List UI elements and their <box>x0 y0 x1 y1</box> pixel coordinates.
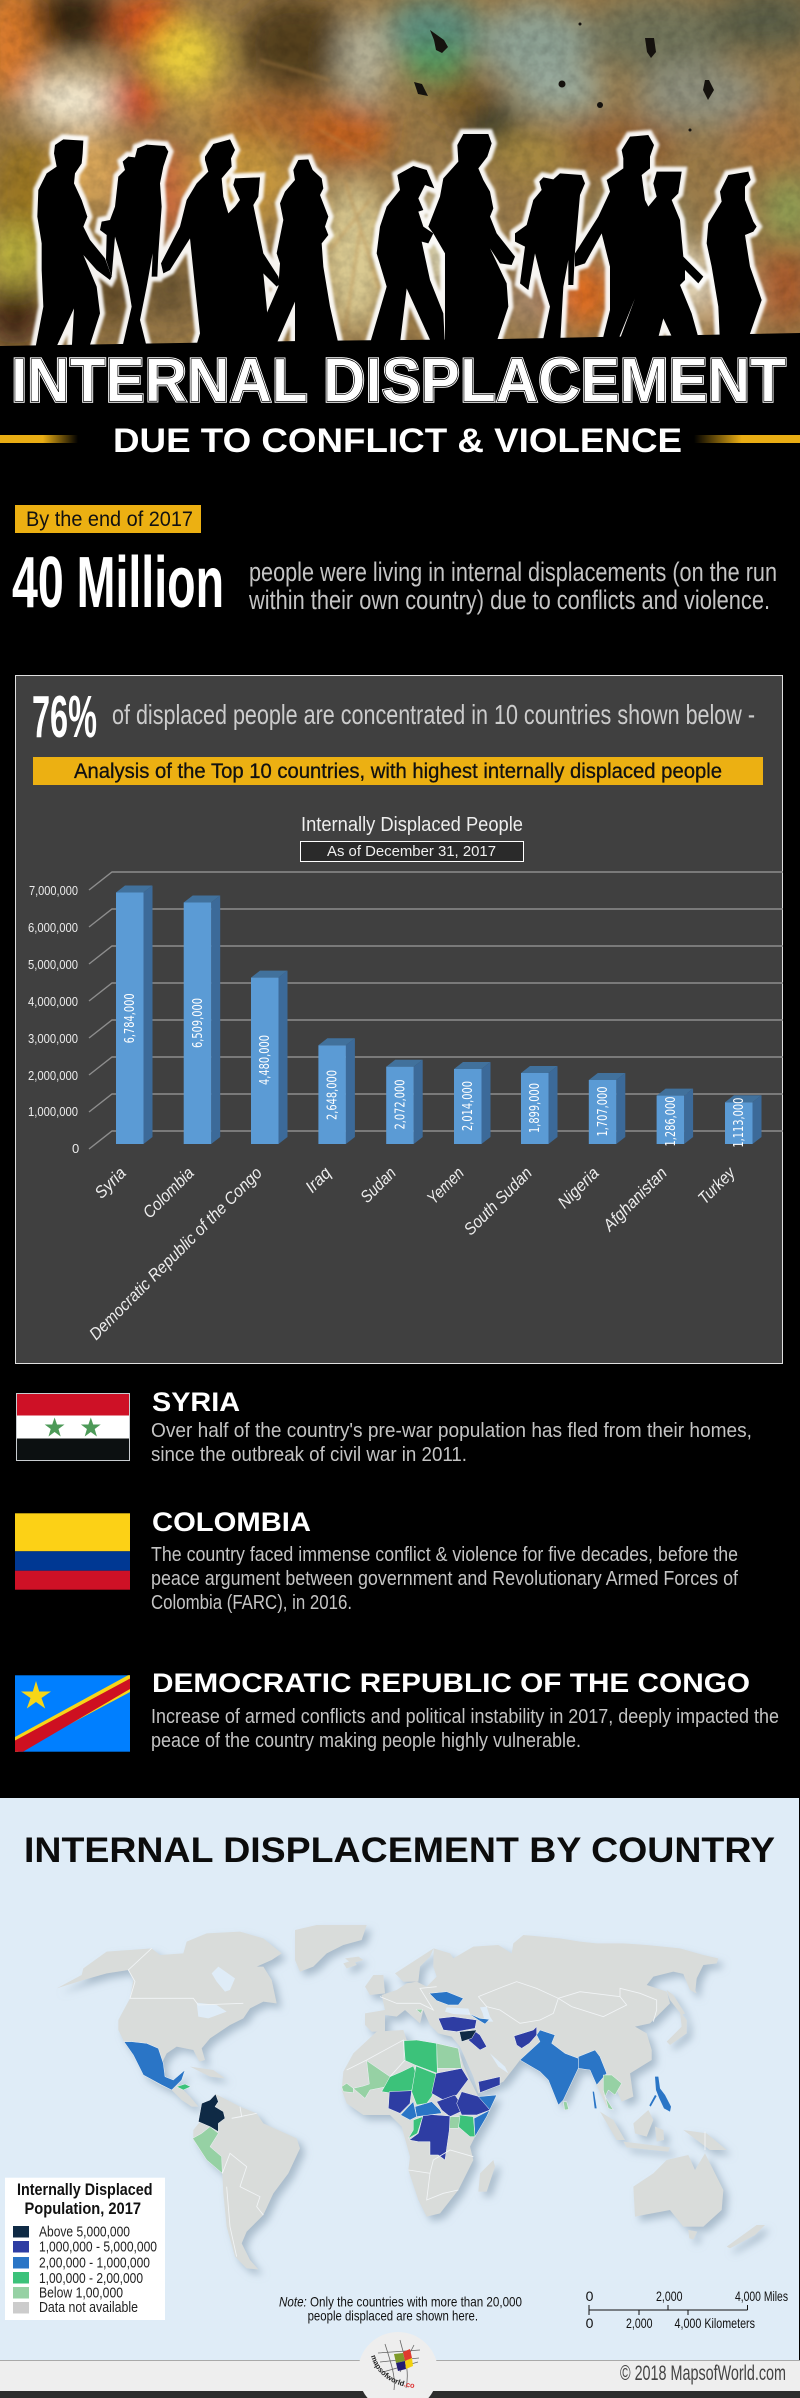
bar: Nigeria: 1,707,000 <box>595 1086 611 1136</box>
y axis labels: 3,000,000 <box>28 1031 78 1046</box>
note: people displaced are shown here. <box>308 2308 478 2324</box>
legend item: 1,000,000 to 5,000,000 <box>13 2238 157 2256</box>
text block: Colombia: Colombia (FARC), in 2016. <box>151 1592 352 1614</box>
text block: DR Congo <box>151 1706 779 1752</box>
x axis country labels: Syria <box>91 1163 130 1202</box>
bar: Afghanistan <box>657 1089 693 1146</box>
heading: Syria: SYRIA <box>152 1387 240 1417</box>
bar: Turkey: 1,113,000 <box>731 1098 747 1148</box>
legend title: Population, 2017 <box>24 2199 141 2218</box>
text block: Syria: Over half of the country's pre-war population has fled from their homes, <box>151 1420 752 1442</box>
legend title <box>17 2180 152 2218</box>
legend item: 1,000,000 to 5,000,000: 1,000,000 - 5,000,000 <box>39 2238 157 2256</box>
map scale bar: 0 <box>586 2315 594 2331</box>
x axis country labels <box>86 1162 740 1344</box>
legend item: 1,00,000 to 2,00,000: 1,00,000 - 2,00,000 <box>39 2270 143 2287</box>
ground <box>0 333 800 352</box>
bar: Iraq: 2,648,000 <box>324 1070 340 1120</box>
banner: analysis heading: Analysis of the Top 10 countries, with highest internally displaced people <box>74 760 722 783</box>
legend item: above 5,000,000 <box>13 2224 130 2241</box>
fire and smoke background <box>0 0 800 352</box>
bar: Syria: 6,784,000 <box>122 993 138 1043</box>
country: Honduras <box>177 2084 191 2090</box>
chart title: Internally Displaced People <box>301 814 523 836</box>
logo: MapsofWorld <box>360 2332 436 2398</box>
subtitle: DUE TO CONFLICT & VIOLENCE <box>113 422 682 460</box>
legend item: data not available: Data not available <box>39 2299 138 2316</box>
map scale bar: 4,000 Kilometers <box>674 2315 755 2331</box>
note <box>279 2294 522 2324</box>
hero image: conflict scene with silhouettes of displaced people <box>0 0 800 352</box>
map water bodies <box>445 2007 508 2073</box>
logo: MapsofWorld: mapsofworld.com <box>371 2355 414 2388</box>
chart subtitle box: As of December 31, 2017 <box>327 843 496 860</box>
text block: Colombia: The country faced immense conflict & violence for five decades, before the <box>151 1544 738 1566</box>
y axis labels: 4,000,000 <box>28 994 78 1009</box>
bar: Democratic Republic of the Congo <box>251 971 288 1144</box>
chart subtitle box <box>300 842 524 862</box>
map scale bar: 0 <box>586 2288 594 2304</box>
decorative gold rule right <box>694 435 800 443</box>
country: Colombia <box>198 2094 225 2132</box>
bar: South Sudan <box>521 1066 558 1144</box>
land masses <box>57 1925 765 2269</box>
bar: Yemen: 2,014,000 <box>460 1081 476 1131</box>
legend item: 2,00,000 to 1,000,000: 2,00,000 - 1,000,000 <box>39 2254 150 2271</box>
y axis labels: 6,000,000 <box>28 920 78 935</box>
bar: South Sudan: 1,899,000 <box>527 1083 543 1133</box>
legend item: data not available <box>13 2299 138 2316</box>
bar: Turkey <box>725 1095 762 1148</box>
icon: flag of Colombia <box>15 1513 130 1590</box>
map: shaded countries of Africa and the Middle East <box>342 1992 500 2160</box>
legend item: 2,00,000 to 1,000,000 <box>13 2254 150 2271</box>
map section heading: INTERNAL DISPLACEMENT BY COUNTRY <box>24 1831 775 1870</box>
key figure: 76 percent: 76% <box>32 684 97 750</box>
map scale bar: 2,000 <box>626 2315 653 2331</box>
y axis labels: 0 <box>72 1141 79 1156</box>
country: Mexico <box>124 2042 185 2090</box>
panel: map section background <box>0 1798 799 2398</box>
y axis labels: 2,000,000 <box>28 1068 78 1083</box>
legend title: Internally Displaced <box>17 2180 152 2199</box>
panel: top 10 countries <box>16 676 783 1364</box>
silhouettes of walking people <box>35 134 762 350</box>
bar: Nigeria <box>589 1073 625 1144</box>
legend item: above 5,000,000: Above 5,000,000 <box>39 2224 130 2241</box>
bar: Sudan <box>386 1060 423 1144</box>
map: shaded countries of the Americas <box>124 2042 225 2173</box>
x axis country labels: Yemen <box>423 1163 468 1208</box>
y axis labels: 7,000,000 <box>29 883 78 898</box>
x axis country labels: Colombia <box>139 1163 198 1222</box>
bar: Afghanistan: 1,286,000 <box>663 1096 679 1146</box>
icon: helicopters and debris in the sky <box>414 22 714 132</box>
heading: Colombia: COLOMBIA <box>152 1507 311 1537</box>
footer band <box>0 2360 800 2398</box>
text block: Syria: since the outbreak of civil war in 2011. <box>151 1444 467 1466</box>
x axis country labels: Turkey <box>694 1162 740 1208</box>
text block: Colombia <box>151 1544 738 1614</box>
legend item: below 1,00,000 <box>13 2284 123 2301</box>
note: Note: Only the countries with more than 20,000 <box>279 2294 522 2310</box>
world map <box>57 1925 765 2269</box>
text block: 40 million description <box>248 557 777 615</box>
bar: Colombia: 6,509,000 <box>190 998 206 1048</box>
bar: Democratic Republic of the Congo: 4,480,000 <box>257 1035 273 1085</box>
bar: Yemen <box>454 1062 490 1144</box>
map scale bar <box>586 2288 788 2331</box>
bar: Iraq <box>318 1038 355 1144</box>
map lakes and Hudson Bay <box>197 1967 235 2018</box>
country: Peru <box>193 2127 222 2173</box>
legend item: below 1,00,000: Below 1,00,000 <box>39 2284 123 2301</box>
x axis country labels: South Sudan <box>460 1163 536 1239</box>
heading: Democratic Republic of the Congo: DEMOCRATIC REPUBLIC OF THE CONGO <box>152 1668 750 1698</box>
map: country border lines <box>128 1948 705 2257</box>
map scale bar: 2,000 <box>656 2288 683 2304</box>
map: Americas <box>57 1925 367 2269</box>
x axis country labels: Sudan <box>357 1163 400 1207</box>
decorative gold rule left <box>0 435 78 443</box>
bar: Sudan: 2,072,000 <box>392 1080 408 1130</box>
key figure: 40 million: 40 Million <box>12 543 224 623</box>
y axis labels: 5,000,000 <box>28 957 78 972</box>
legend item: 1,00,000 to 2,00,000 <box>13 2270 143 2287</box>
3D bar chart <box>28 872 783 1344</box>
section: Colombia <box>15 1507 738 1614</box>
x axis country labels: Democratic Republic of the Congo <box>86 1163 266 1344</box>
callout: by the end of 2017: By the end of 2017 <box>26 508 193 531</box>
x axis country labels: Afghanistan <box>599 1163 671 1235</box>
map: Africa <box>342 2030 497 2217</box>
y axis labels: 1,000,000 <box>28 1104 78 1119</box>
map: Eurasia and Oceania <box>343 1935 765 2248</box>
map: shaded countries of Asia <box>514 2027 671 2112</box>
y axis labels <box>28 883 79 1156</box>
text block: Colombia: peace argument between government and Revolutionary Armed Forces of <box>151 1568 738 1590</box>
icon: flag of Syria <box>16 1393 130 1461</box>
x axis country labels: Nigeria <box>554 1163 603 1212</box>
x axis country labels: Iraq <box>302 1163 335 1197</box>
section: Democratic Republic of the Congo <box>15 1668 779 1752</box>
section: Syria <box>16 1387 752 1466</box>
text block: DR Congo: peace of the country making people highly vulnerable. <box>151 1730 581 1752</box>
text block: Syria <box>151 1420 752 1466</box>
bar: Syria <box>116 886 152 1144</box>
bar: Colombia <box>184 896 220 1144</box>
legend <box>5 2178 165 2320</box>
icon: flag of DR Congo <box>15 1675 130 1752</box>
